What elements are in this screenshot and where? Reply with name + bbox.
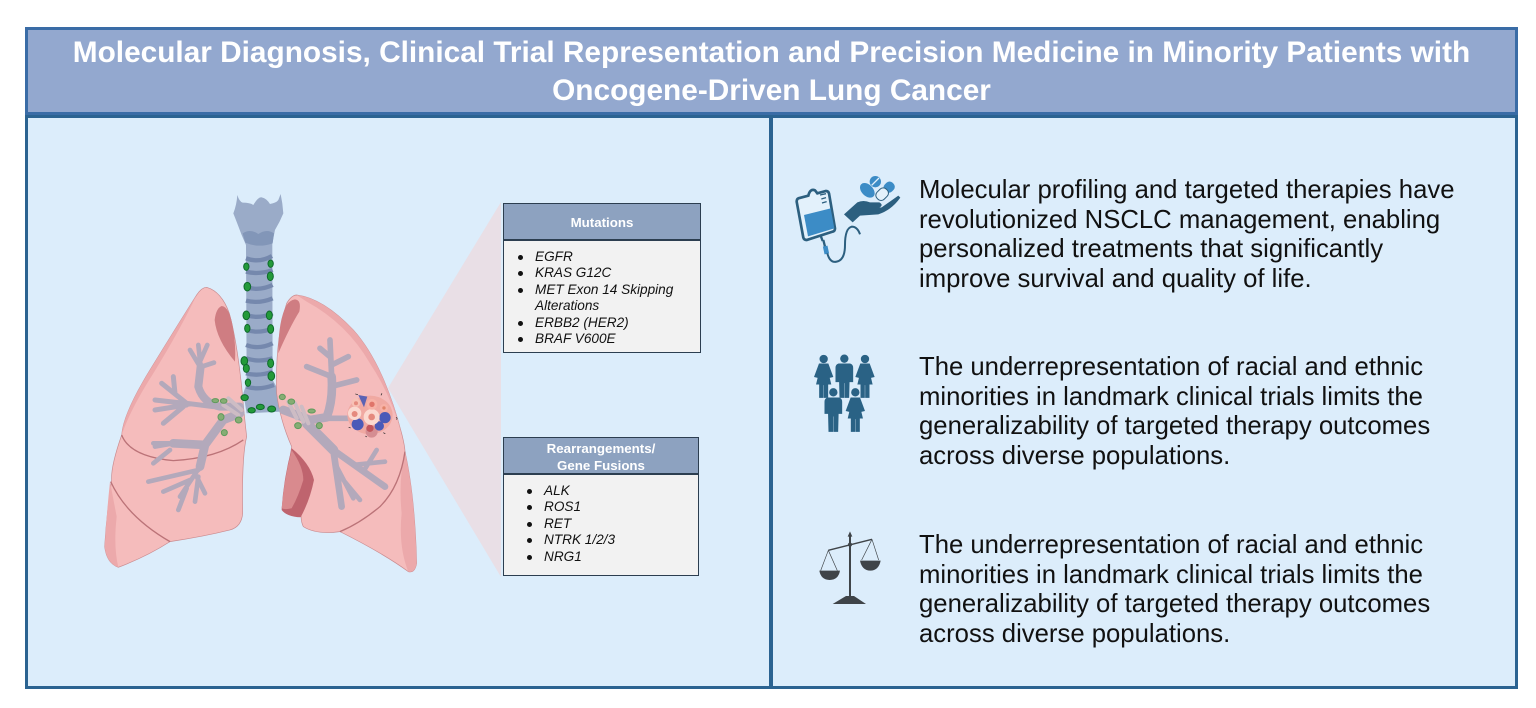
bronchi — [148, 345, 242, 510]
rearrangements list: ALK — [544, 483, 570, 498]
mutations list — [503, 241, 701, 353]
left lung (image right) — [276, 295, 417, 572]
rearrangements list: ROS1 — [544, 499, 581, 514]
mutations list: KRAS G12C — [535, 265, 611, 280]
text: molecular profiling — [919, 176, 1454, 293]
text: underrepresentation repeated: generalizability of targeted therapy outcomes — [919, 590, 1430, 618]
icon: group of people — [814, 354, 875, 432]
trachea — [233, 194, 283, 413]
title: Molecular Diagnosis, Clinical Trial Representation and Precision Medicine in Minority Patients with — [73, 36, 1470, 69]
text: molecular profiling: personalized treatments that significantly — [919, 235, 1383, 263]
rearrangements list: NTRK 1/2/3 — [544, 532, 615, 547]
icon: balance scale — [819, 532, 881, 604]
text: underrepresentation repeated — [919, 531, 1430, 648]
text: underrepresentation: generalizability of targeted therapy outcomes — [919, 412, 1430, 440]
mutations list: MET Exon 14 Skipping — [535, 282, 673, 297]
rearrangements heading — [503, 437, 699, 475]
text: underrepresentation repeated: across diverse populations. — [919, 620, 1230, 648]
tumour — [347, 393, 397, 438]
title: Oncogene-Driven Lung Cancer — [552, 74, 991, 107]
text: underrepresentation repeated: minorities in landmark clinical trials limits the — [919, 561, 1423, 589]
mutations list: Alterations — [535, 298, 599, 313]
bronchi — [283, 340, 385, 507]
text: molecular profiling: Molecular profiling and targeted therapies have — [919, 176, 1454, 204]
mutations list: EGFR — [535, 249, 573, 264]
rearrangements heading: Rearrangements/ — [547, 441, 655, 456]
box: mutations — [503, 203, 701, 353]
text: underrepresentation: minorities in landmark clinical trials limits the — [919, 383, 1423, 411]
text: underrepresentation repeated: The underrepresentation of racial and ethnic — [919, 531, 1423, 559]
right lung (image left) — [105, 287, 247, 567]
rearrangements list: RET — [544, 516, 571, 531]
title — [25, 27, 1518, 115]
text: underrepresentation: The underrepresentation of racial and ethnic — [919, 353, 1423, 381]
panel: molecular diagnosis — [25, 115, 773, 689]
text: underrepresentation: across diverse populations. — [919, 442, 1230, 470]
lymph nodes — [241, 260, 276, 413]
mutations list: BRAF V600E — [535, 331, 616, 346]
rearrangements list: NRG1 — [544, 549, 582, 564]
panel: key messages — [769, 115, 1518, 689]
mutations list: ERBB2 (HER2) — [535, 315, 629, 330]
text: underrepresentation — [919, 353, 1430, 470]
mutations heading — [503, 203, 701, 241]
text: molecular profiling: revolutionized NSCLC management, enabling — [919, 206, 1440, 234]
text: molecular profiling: improve survival and quality of life. — [919, 265, 1312, 293]
rearrangements heading: Gene Fusions — [557, 458, 645, 473]
mutations heading: Mutations — [571, 215, 633, 230]
box: rearrangements — [503, 437, 699, 576]
icon: IV bag and hand with pills — [795, 176, 900, 263]
rearrangements list — [503, 475, 699, 576]
